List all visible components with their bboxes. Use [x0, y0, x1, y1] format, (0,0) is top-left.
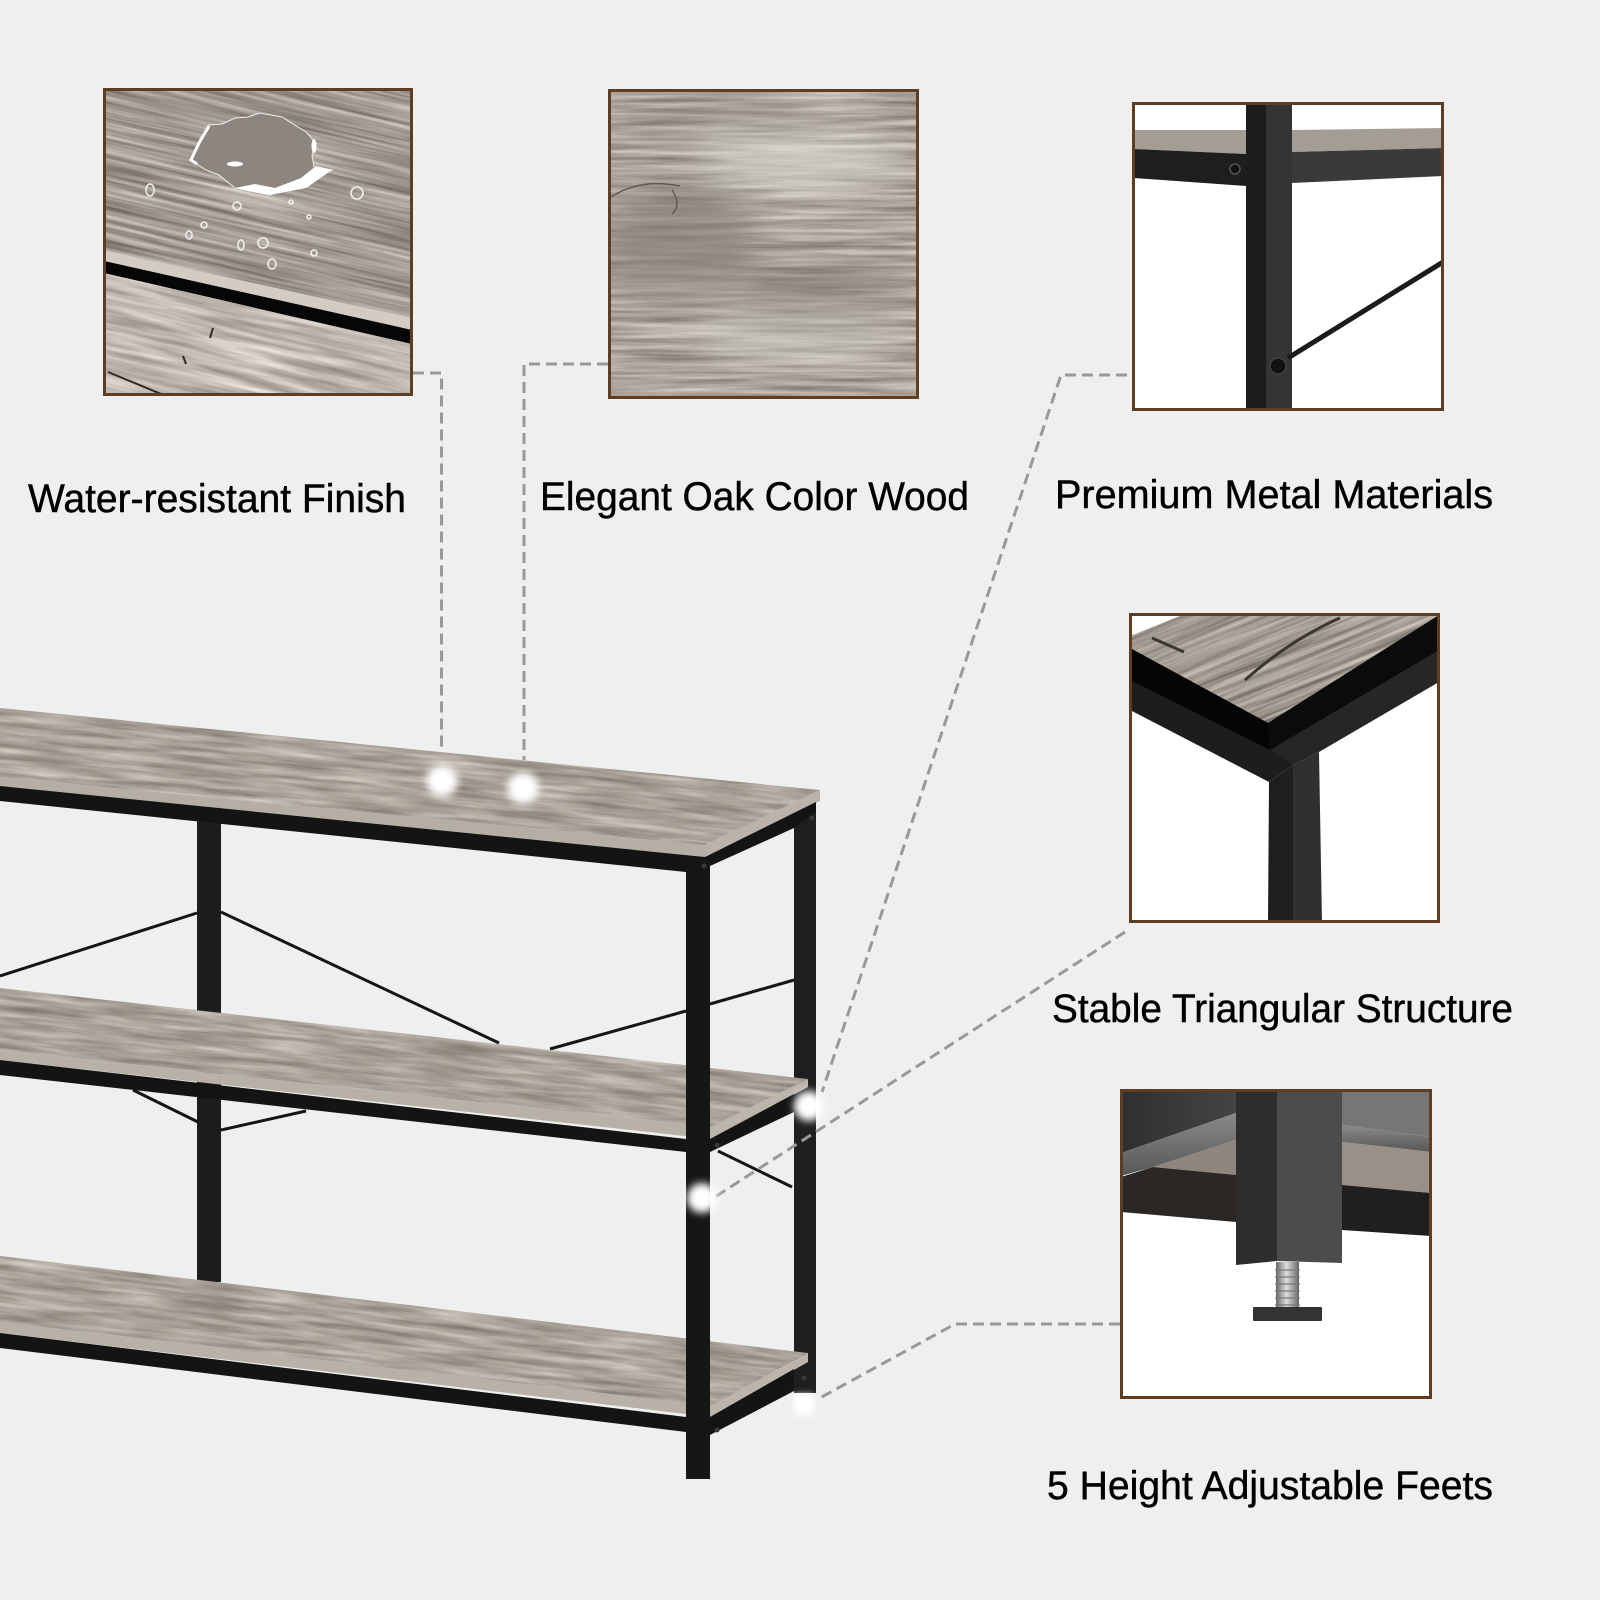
wood underside	[1132, 616, 1437, 723]
right background frame	[1342, 1090, 1431, 1236]
vertical leg	[1268, 765, 1293, 922]
frame	[1134, 104, 1442, 410]
middle shelf	[0, 988, 808, 1152]
white ground	[1133, 103, 1443, 410]
back right leg	[794, 808, 816, 1393]
front right leg	[686, 859, 710, 1479]
console table	[0, 708, 820, 1479]
lower wood plank	[106, 274, 410, 393]
tonal patches	[605, 96, 910, 358]
label: elegant oak color wood: Elegant Oak Color Wood	[540, 475, 969, 519]
threaded screw	[1275, 1262, 1300, 1308]
wood strip	[1134, 130, 1246, 154]
leader lines	[413, 364, 1127, 1399]
square leg	[1236, 1090, 1342, 1265]
bolts	[1270, 358, 1286, 374]
panel: metal detail	[1133, 103, 1443, 410]
label: height adjustable feet: 5 Height Adjustable Feets	[1047, 1464, 1493, 1508]
metal rails	[1134, 149, 1246, 186]
back left leg	[197, 815, 221, 1282]
frame	[610, 90, 918, 398]
wood grain	[609, 90, 918, 398]
label: stable triangular structure: Stable Triangular Structure	[1052, 987, 1513, 1031]
frame	[1122, 1090, 1430, 1398]
knot	[611, 184, 680, 214]
label: premium metal materials: Premium Metal Materials	[1055, 473, 1493, 517]
white ground	[1130, 614, 1439, 922]
left background frame	[1121, 1090, 1236, 1222]
metal leg	[1246, 103, 1266, 410]
brace rod	[1288, 262, 1443, 358]
panel: oak wood	[605, 90, 918, 398]
panel: adjustable feet	[1121, 1090, 1431, 1398]
bottom shelf	[0, 1256, 808, 1435]
frame	[1130, 614, 1438, 922]
top shelf	[0, 708, 820, 872]
cross braces	[0, 912, 794, 1187]
right frame bar	[1268, 615, 1439, 765]
panel: water-resistant finish	[103, 88, 413, 396]
panel: triangular structure	[1129, 613, 1440, 923]
frame	[104, 90, 412, 394]
water droplets	[146, 184, 363, 269]
wood surface	[106, 91, 410, 344]
foot pad	[1253, 1307, 1322, 1321]
frame bolts	[702, 816, 814, 1432]
shelf edge and black rail	[104, 250, 412, 344]
water puddle	[191, 113, 332, 195]
white ground	[1121, 1090, 1431, 1398]
glow markers	[422, 761, 828, 1415]
label: water-resistant finish: Water-resistant Finish	[28, 477, 406, 521]
left frame bar	[1130, 648, 1293, 782]
